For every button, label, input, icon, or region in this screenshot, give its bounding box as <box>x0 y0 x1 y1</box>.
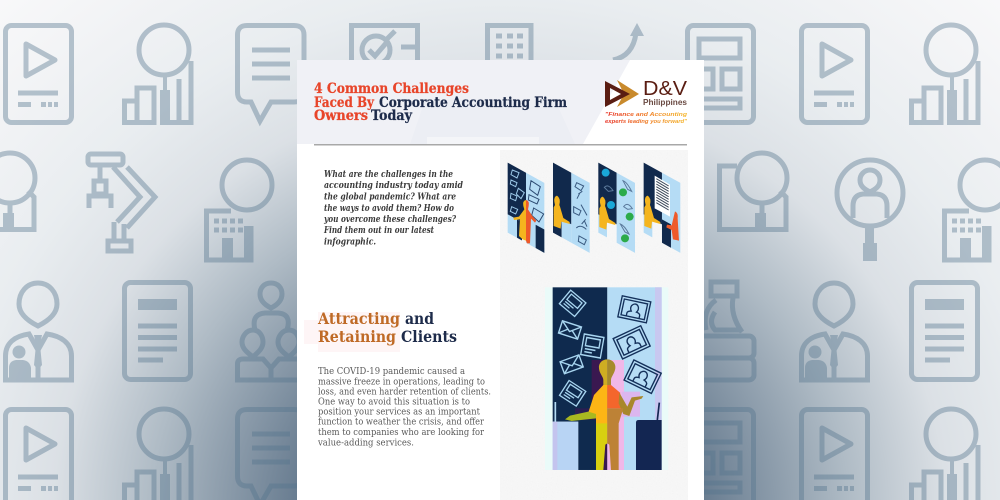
document icons <box>559 290 604 406</box>
heading: Attracting and Retaining Clients: Clients <box>401 327 457 346</box>
panel 2 <box>553 163 590 253</box>
logo: D&V Philippines <box>605 78 688 125</box>
icon: businessman <box>802 283 868 380</box>
illustration: four isometric panels <box>508 163 680 253</box>
icon: magnifier over bar chart <box>124 409 191 500</box>
body text: position your services as an important <box>318 406 480 417</box>
icon: speech bubble <box>238 26 304 121</box>
intro text <box>323 170 463 248</box>
body text: function to weather the crisis, and offer <box>318 417 484 428</box>
panel 4 <box>644 163 680 253</box>
icon: play document <box>802 26 868 122</box>
title: Owners <box>314 108 368 124</box>
title <box>314 81 567 124</box>
person silhouette <box>565 359 643 470</box>
title: Today <box>371 108 413 124</box>
purple and pink blocks <box>575 360 640 470</box>
body text: The COVID-19 pandemic caused a <box>318 366 465 377</box>
icon: magnifier over box <box>0 153 35 230</box>
body text: value-adding services. <box>317 437 414 448</box>
panel 3 <box>598 163 635 253</box>
icon: layout document <box>688 410 754 500</box>
lower desks <box>553 420 662 470</box>
icon: magnifier over bar chart <box>912 409 978 500</box>
icon: logo arrows <box>605 80 639 107</box>
heading: Attracting and Retaining Clients: Retaining <box>318 327 396 346</box>
body text: them to companies who are looking for <box>318 427 484 438</box>
icon: magnifier over building <box>206 160 272 262</box>
icon: office block <box>488 26 531 125</box>
heading: Attracting and Retaining Clients: Attracting <box>317 309 400 328</box>
logo: D&V Philippines: Philippines <box>643 97 687 107</box>
icon: person in magnifier <box>837 160 903 261</box>
panel: header band <box>297 60 630 144</box>
title: Faced By <box>314 95 375 111</box>
intro text: infographic. <box>324 238 376 248</box>
intro text: the global pandemic? What are <box>324 192 456 202</box>
profile frames <box>613 296 661 393</box>
icon: speech bubble <box>238 410 304 500</box>
intro text: the ways to avoid them? How do <box>324 204 454 214</box>
icon: audience <box>238 283 304 380</box>
heading highlight <box>304 312 400 352</box>
panel: infographic page <box>297 60 704 500</box>
icon: stacked books <box>690 282 754 380</box>
icon: layout document <box>688 26 754 122</box>
icon: businessman <box>6 283 72 380</box>
illustration: person between documents and profiles <box>545 287 668 470</box>
panel 1 <box>508 163 544 253</box>
icon: text document <box>124 282 190 380</box>
icon: magnifier over bar chart <box>912 25 978 125</box>
icon: rising arrow <box>613 23 644 60</box>
intro text: you overcome these challenges? <box>323 215 457 225</box>
title: Corporate Accounting Firm <box>379 95 567 111</box>
body text: loss, and even harder retention of clients. <box>318 386 491 397</box>
icon: robot arm <box>88 154 155 251</box>
intro text: accounting industry today amid <box>324 181 463 191</box>
intro text: What are the challenges in the <box>324 170 453 180</box>
icon: checklist document <box>352 26 418 122</box>
logo: D&V Philippines: experts leading you forward" <box>605 119 687 125</box>
left navy wall <box>553 287 607 422</box>
heading: Attracting and Retaining Clients: and <box>405 309 434 328</box>
body text: massive freeze in operations, leading to <box>318 376 485 387</box>
body text <box>317 366 491 448</box>
heading: Attracting and Retaining Clients <box>317 309 457 346</box>
title: 4 Common Challenges <box>314 81 469 97</box>
icon: play document <box>6 26 72 122</box>
halo <box>545 287 668 470</box>
icon: magnifier over bar chart <box>124 25 191 125</box>
panel: textured illustration column <box>500 150 688 500</box>
icon: text document <box>912 282 978 380</box>
intro text: Find them out in our latest <box>323 226 434 236</box>
body text: One way to avoid this situation is to <box>318 396 470 407</box>
icon: magnifier over building <box>944 160 1000 262</box>
antennas <box>553 402 558 422</box>
icon: magnifier over box <box>720 153 787 230</box>
right blue wall <box>607 287 662 470</box>
logo: D&V Philippines: "Finance and Accounting <box>605 112 688 118</box>
logo: D&V Philippines: D&V <box>643 78 688 100</box>
icon: play document <box>802 410 868 500</box>
icon: play document <box>6 410 72 500</box>
divider <box>314 144 687 146</box>
